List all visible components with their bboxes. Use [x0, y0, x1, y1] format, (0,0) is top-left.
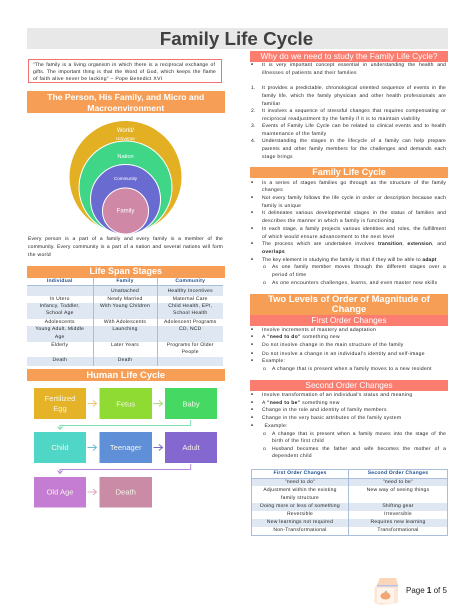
text: family life cycle list: The process which are undertaken involves transition, extension, and: [262, 241, 446, 247]
flow chart: human life cycle: Fetus: [116, 400, 135, 408]
text: why study list: It is very important concept essential in understanding the health and: [262, 62, 446, 68]
text: first order list: ▪: [251, 351, 253, 357]
text: family life cycle list: It delineates various developmental stages in the status of families and: [262, 210, 446, 216]
table: life span stages: Adolescent Programs: [164, 318, 217, 324]
text: second order list: Involve transformation of an individual's status and meaning: [262, 392, 412, 398]
heading: life span stages: [27, 266, 224, 278]
heading: human life cycle: Human Life Cycle: [86, 369, 165, 380]
table: first vs second order changes: Shifting gear: [382, 503, 414, 509]
flow chart: human life cycle: Adult: [182, 443, 201, 452]
text: family life cycle list: Is a series of stages families go through as the structure of the family: [262, 180, 446, 186]
text: family life cycle list: of which would ensure advancement to the next level: [262, 234, 395, 240]
text: family life cycle list: ▪: [251, 241, 253, 247]
heading: why study: Why do we need to study the Family Life Cycle?: [260, 51, 438, 61]
heading: family life cycle: [250, 167, 448, 178]
callout: quote: gifts. The important thing is that the Word of God, which keeps the flame: [33, 69, 216, 75]
text: first order list: A "need to do" something new: [262, 334, 340, 340]
table: first vs second order changes: New way of seeing things: [367, 487, 429, 493]
heading: two levels of order: Two Levels of Order of Magnitude of Change: [268, 293, 430, 314]
table: life span stages: Later Years: [111, 342, 139, 348]
table: first vs second order changes: "need to be": [383, 479, 413, 485]
text: second order list: Example:: [264, 423, 288, 429]
footer: page number: Page 1 of 5: [406, 586, 447, 595]
text: why study list: It involves a sequence of stressful changes that requires compensating or: [262, 108, 446, 114]
title: Family Life Cycle: [160, 28, 313, 49]
table: first vs second order changes: Second Order Changes: [368, 470, 428, 476]
text: why study list: 1.: [251, 85, 256, 91]
text: family life cycle list: As one family member moves through the different stages over a: [272, 264, 446, 270]
text: family life cycle list: [251, 180, 446, 286]
text: first order list: Do not involve change in the main structure of the family: [262, 342, 404, 348]
table: life span stages: Death: [52, 356, 67, 362]
table: first vs second order changes: Reversible: [287, 511, 313, 517]
text: second order list: o: [263, 446, 266, 452]
flow chart: human life cycle: Old Age: [46, 488, 74, 496]
flow chart: human life cycle: Child: [51, 443, 69, 452]
heading: first order changes: First Order Changes: [311, 315, 387, 325]
text: family life cycle list: changes: [262, 187, 283, 193]
text: why study list: maintenance of the family: [262, 131, 326, 137]
text: why study list: [251, 62, 446, 160]
icon: milk carton: [374, 578, 398, 605]
chart: nested circles: Family: [117, 208, 134, 214]
callout: quote: [28, 59, 222, 83]
text: family life cycle list: describes the manner in which a family is functioning: [262, 218, 395, 224]
text: first order list: o: [263, 366, 266, 372]
text: why study list: Events of Family Life Cycle can be related to clinical events and to health: [262, 123, 446, 129]
text: family life cycle list: overlaps: [262, 249, 285, 255]
table: life span stages: Adolescents: [45, 318, 75, 324]
table: life span stages: School Age: [46, 310, 74, 316]
text: first order list: [251, 327, 432, 372]
table: life span stages: Unattached: [111, 288, 139, 294]
table: life span stages: With Young Children: [100, 302, 150, 308]
text: family life cycle list: The key element in studying the family is that if they will be able to adapt: [262, 257, 437, 263]
table: first vs second order changes: Transformational: [377, 527, 419, 533]
table: life span stages: Community: [175, 278, 205, 284]
text: why study list: familiar: [262, 101, 281, 107]
text: why study list: 2.: [251, 108, 256, 114]
flow chart: human life cycle: Death: [116, 488, 136, 496]
table: life span stages: Infancy, Toddler,: [40, 302, 80, 308]
table: first vs second order changes: First Order Changes: [273, 470, 327, 476]
text: second order list: A "need to be" something new: [262, 400, 340, 406]
table: first vs second order changes: Non-Transformational: [273, 527, 327, 533]
table: first vs second order changes: Adjustment within the existing: [263, 487, 337, 493]
text: family life cycle list: o: [263, 280, 266, 286]
chart: nested circles: World/: [117, 128, 134, 134]
heading: person family macroenvironment: The Person, His Family, and Micro and Macroenvironment: [47, 92, 204, 112]
text: first order list: Involve increments of mastery and adaptation: [262, 327, 376, 333]
text: why study list: family life, which the family physician and other health professionals are: [262, 93, 446, 99]
text: every person paragraph: [28, 236, 223, 258]
table: life span stages: Family: [116, 278, 134, 284]
text: family life cycle list: o: [263, 264, 266, 270]
table: life span stages: Maternal Care: [173, 296, 208, 302]
text: second order list: Change in the role and identity of family members: [262, 407, 387, 413]
table: life span stages: Child Health, EPI,: [168, 302, 212, 308]
table: first vs second order changes: Requires new learning: [370, 519, 426, 525]
text: family life cycle list: period of time: [272, 272, 306, 278]
heading: human life cycle: [27, 369, 224, 381]
text: second order list: birth of the first child: [272, 438, 324, 444]
text: second order list: ▪: [251, 400, 253, 406]
text: family life cycle list: In each stage, a family projects various identities and roles, the fulfillment: [262, 226, 446, 232]
text: family life cycle list: As one encounters challenges, learns, and even master new skills: [272, 280, 437, 286]
text: family life cycle list: ▪: [251, 226, 253, 232]
table: life span stages: Launching: [112, 326, 138, 332]
text: second order list: [251, 392, 446, 459]
text: family life cycle list: Not every family follows the life cycle in order or description because each: [262, 195, 446, 201]
text: second order list: dependent child: [272, 453, 312, 459]
text: second order list: ▪: [251, 407, 253, 413]
text: family life cycle list: ▪: [251, 210, 253, 216]
text: second order list: ▪: [251, 392, 253, 398]
table: life span stages: School Health: [173, 310, 207, 316]
flow chart: human life cycle: Egg: [53, 404, 67, 413]
table: life span stages: CD, NCD: [179, 326, 202, 332]
heading: first order changes: [250, 315, 448, 326]
flow chart: human life cycle: Teenager: [110, 443, 142, 452]
flow chart: human life cycle: Baby: [182, 400, 200, 408]
text: first order list: Example:: [262, 358, 285, 364]
table: life span stages: Age: [55, 334, 65, 340]
table: first vs second order changes: New learnings not required: [267, 519, 333, 525]
callout: quote: "The family is a living organism in which there is a reciprocal exchange of: [33, 62, 215, 68]
text: every person paragraph: the world: [28, 252, 51, 258]
text: why study list: 4.: [251, 138, 256, 144]
text: second order list: Change in the very basic attributes of the family system: [262, 415, 401, 421]
text: second order list: o: [263, 431, 266, 437]
text: second order list: Husband becomes the father and wife becomes the mother of a: [272, 446, 446, 452]
text: second order list: A change that is present when a family moves into the stage of the: [272, 431, 446, 437]
heading: life span stages: Life Span Stages: [89, 266, 162, 276]
heading: second order changes: [250, 380, 448, 391]
title: [27, 28, 448, 49]
text: first order list: ▪: [251, 342, 253, 348]
text: why study list: illnesses of patients and their families: [262, 70, 357, 76]
text: first order list: ▪: [251, 358, 253, 364]
text: second order list: ▪: [251, 415, 253, 421]
table: life span stages: With Adolescents: [104, 318, 146, 324]
table: first vs second order changes: family structure: [281, 495, 319, 501]
callout: quote: of faith alive never be lacking" – Pope Benedict XVI: [33, 76, 162, 82]
table: life span stages: People: [182, 349, 199, 355]
text: why study list: ▪: [251, 62, 253, 68]
table: first vs second order changes: [251, 469, 448, 536]
table: life span stages: [27, 278, 223, 366]
text: why study list: 3.: [251, 123, 256, 129]
table: first vs second order changes: Irreversible: [384, 511, 412, 517]
text: why study list: It provides a predictable, chronological oriented sequence of events in the: [262, 85, 446, 91]
flow chart: human life cycle: Fertilized: [45, 394, 75, 403]
text: why study list: reciprocal readjustment by the family if it is to maintain viability: [262, 116, 420, 122]
table: life span stages: Elderly: [51, 342, 68, 348]
text: family life cycle list: ▪: [251, 180, 253, 186]
text: first order list: ▪: [251, 327, 253, 333]
text: first order list: ▪: [251, 334, 253, 340]
table: life span stages: Newly Married: [107, 296, 143, 302]
chart: nested circles: Nation: [117, 154, 134, 160]
text: second order list: ▪: [251, 423, 253, 429]
table: first vs second order changes: "need to do": [285, 479, 315, 485]
text: family life cycle list: family is unique: [262, 203, 301, 209]
table: first vs second order changes: Doing more or less of something: [260, 503, 340, 509]
table: life span stages: Death: [118, 356, 132, 362]
text: why study list: parents and other family members for the challenges and demands each: [262, 146, 446, 152]
table: life span stages: In Utero: [50, 296, 70, 302]
text: why study list: Understanding the stages in the lifecycle of a family can help prepare: [262, 138, 446, 144]
text: every person paragraph: community. Every community is a part of a nation and several nations will form: [28, 244, 223, 250]
chart: nested circles: [70, 121, 182, 234]
text: first order list: A change that is present when a family moves to a new resident: [272, 366, 432, 372]
table: life span stages: Young Adult, Middle: [35, 326, 84, 332]
text: every person paragraph: Every person is a part of a family and every family is a member of the: [28, 236, 223, 242]
text: family life cycle list: ▪: [251, 195, 253, 201]
table: life span stages: Programs for Older: [167, 342, 214, 348]
text: family life cycle list: ▪: [251, 257, 253, 263]
table: life span stages: Healthy Incentives: [168, 288, 213, 294]
chart: nested circles: Community: [114, 176, 138, 181]
flow chart: human life cycle: [34, 388, 217, 508]
heading: family life cycle: Family Life Cycle: [312, 167, 386, 177]
heading: second order changes: Second Order Changes: [305, 380, 393, 390]
table: life span stages: Individual: [47, 278, 73, 284]
text: first order list: Do not involve a change in an individual's identity and self-image: [262, 351, 425, 357]
text: why study list: stage brings: [262, 154, 293, 160]
chart: nested circles: Universe: [116, 136, 135, 142]
